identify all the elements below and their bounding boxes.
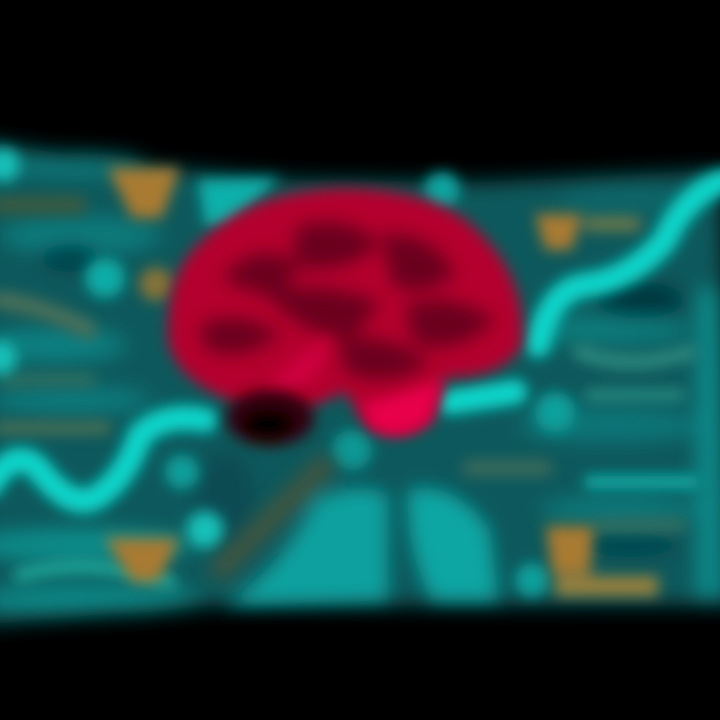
brain highlights: [262, 335, 442, 435]
icon: orange blobs: [105, 168, 658, 586]
chart: bright teal trend line: [0, 180, 720, 501]
brain stem dark spot: [226, 390, 314, 446]
teal text-like stripes: [0, 205, 692, 582]
panel: teal background band: [0, 140, 720, 625]
brain folds: [200, 222, 495, 379]
icon: bright teal blobs: [0, 148, 575, 597]
icon: teal leaves at bottom: [215, 460, 498, 605]
icon: red brain: [168, 188, 522, 446]
